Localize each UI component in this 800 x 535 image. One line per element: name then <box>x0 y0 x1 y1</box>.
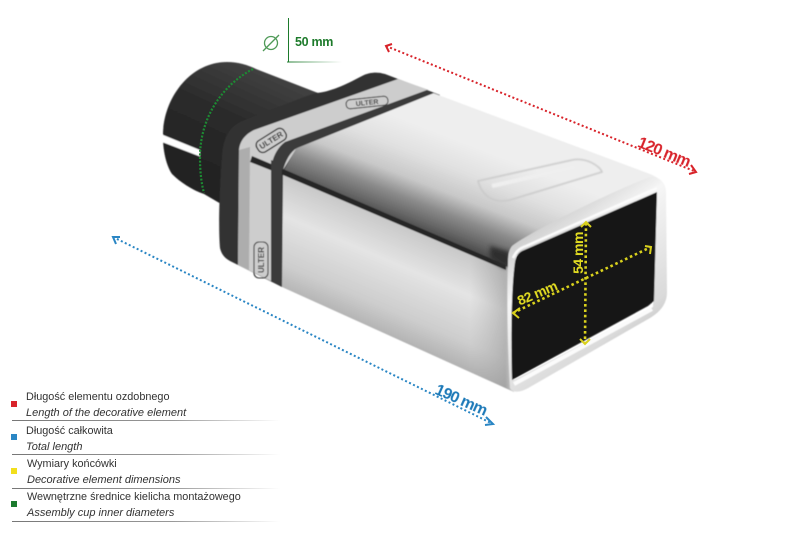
blue dimension: total length <box>113 237 493 425</box>
dark collar <box>219 73 440 287</box>
red dimension: decorative element length <box>386 44 696 174</box>
dark edge between top and side <box>250 156 506 270</box>
opening bottom highlight <box>514 309 652 384</box>
legend item: blue <box>11 425 280 455</box>
green dimension: cup diameter <box>200 18 342 193</box>
legend item: yellow <box>11 458 280 489</box>
legend item: green: Wewnętrzne średnice kielicha montażowego <box>27 491 241 503</box>
exhaust tip product photo <box>162 62 667 392</box>
polished front lip <box>507 177 667 392</box>
top surface <box>283 93 665 268</box>
legend item: yellow: Wymiary końcówki <box>27 458 117 470</box>
corner shadow <box>490 246 510 268</box>
yellow dimensions: tip opening: 54 mm <box>570 232 586 274</box>
collar logos: ULTER <box>258 130 285 151</box>
blue dimension: total length: 190 mm <box>432 382 490 420</box>
yellow dimensions: tip opening <box>513 222 651 344</box>
dark band on side <box>271 160 282 287</box>
yellow dimensions: tip opening: 82 mm <box>515 277 559 309</box>
green dimension: cup diameter: 50 mm <box>295 35 333 49</box>
legend <box>11 391 280 522</box>
dark band on top <box>272 90 434 170</box>
collar logos: ULTER <box>257 247 266 273</box>
opening top highlight <box>513 188 657 258</box>
red dimension: decorative element length: 120 mm <box>635 134 693 171</box>
legend item: red: Length of the decorative element <box>26 407 187 419</box>
pipe slit <box>162 134 200 156</box>
light collar band <box>238 79 429 281</box>
legend item: green <box>11 491 280 522</box>
embossed logo on top surface <box>478 159 602 201</box>
legend item: blue: Total length <box>26 441 82 453</box>
tip opening <box>511 192 657 380</box>
side end shading <box>470 251 514 392</box>
legend item: red <box>11 391 280 421</box>
mounting pipe <box>162 62 330 215</box>
diameter symbol <box>263 35 279 51</box>
collar logos <box>254 96 388 278</box>
legend item: yellow: Decorative element dimensions <box>27 474 181 486</box>
legend item: red: Długość elementu ozdobnego <box>26 391 169 403</box>
legend item: green: Assembly cup inner diameters <box>26 507 175 519</box>
side surface <box>282 172 514 392</box>
collar logos: ULTER <box>355 99 379 108</box>
legend item: blue: Długość całkowita <box>26 425 114 437</box>
